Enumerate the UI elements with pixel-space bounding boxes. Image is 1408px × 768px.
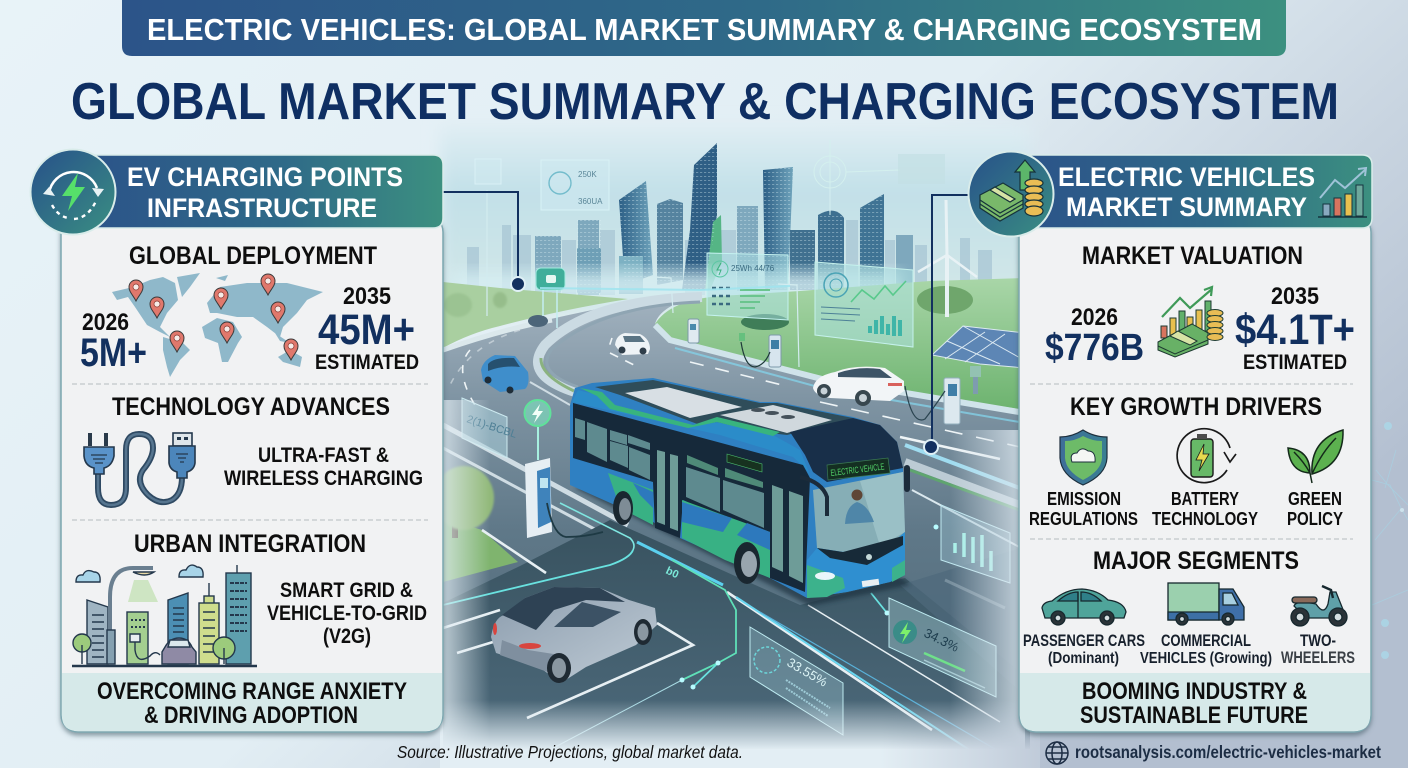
text: green policy	[1287, 488, 1343, 529]
roadside chargers	[688, 319, 981, 424]
central illustration: electric bus in a smart city	[434, 125, 1040, 768]
front cap	[790, 418, 903, 482]
icon: shield emission	[1060, 430, 1107, 485]
top banner	[122, 0, 1286, 56]
parking lines	[443, 530, 1000, 730]
icon: globe	[1046, 742, 1068, 764]
text: battery technology	[1152, 488, 1258, 529]
charging station beside the bus	[524, 400, 603, 538]
stat: 2026 $776B: $776B	[1045, 327, 1144, 369]
source note: Source: Illustrative Projections, global market data.	[397, 742, 743, 762]
text: emission regulations: EMISSION	[1047, 488, 1121, 509]
holo: green sign	[536, 268, 565, 328]
bus body	[570, 378, 905, 598]
holo: bolt circle	[814, 140, 900, 215]
blue roof band	[572, 390, 810, 475]
banner title: ELECTRIC VEHICLES: GLOBAL MARKET SUMMARY & CHARGING ECOSYSTEM	[147, 12, 1262, 47]
road edge stripes lower left	[443, 382, 628, 532]
holo: energy stats	[707, 253, 788, 320]
text: commercial vehicles: VEHICLES (Growing)	[1140, 650, 1272, 667]
text: commercial vehicles: COMMERCIAL	[1161, 632, 1251, 650]
grass and tree lower left	[443, 518, 518, 582]
text: smart grid and V2G: VEHICLE-TO-GRID	[267, 601, 427, 625]
road glyph glow: b0	[664, 565, 680, 581]
stat: 2035 $4.1T+ estimated: 2035	[1271, 283, 1319, 310]
circuit nodes	[680, 524, 938, 690]
wind turbine	[918, 200, 977, 317]
stat: 2026 5M+	[80, 309, 147, 375]
text: battery technology: BATTERY	[1171, 488, 1239, 509]
panel footer text	[1080, 678, 1308, 729]
left hill	[443, 282, 628, 348]
road edge curb	[655, 325, 1025, 413]
destination sign: ELECTRIC VEHICLE	[830, 461, 885, 478]
stat: 2035 45M+ estimated: 45M+	[318, 306, 415, 354]
heading: market valuation: MARKET VALUATION	[1082, 242, 1303, 270]
lower body green swooshes	[608, 473, 653, 525]
white car far	[615, 333, 650, 355]
stat: 2026 5M+: 5M+	[80, 331, 147, 375]
holo: 34.3% panel	[889, 598, 996, 697]
windshield	[813, 472, 905, 552]
text: two-wheelers: WHEELERS	[1281, 649, 1355, 667]
rear wheel	[613, 491, 633, 525]
text: passenger cars	[1023, 632, 1145, 667]
text: green policy: GREEN	[1288, 488, 1342, 509]
icon: plug and USB cable	[84, 433, 195, 505]
bus shadow	[575, 460, 910, 606]
stat: 2035 $4.1T+ estimated: $4.1T+	[1235, 306, 1355, 354]
decorative network right edge	[1372, 422, 1408, 659]
text: smart grid and V2G	[267, 578, 427, 648]
electric bus	[570, 378, 910, 606]
holo: left road panel: 2(1)-BCBL	[465, 413, 518, 441]
panel header: EV CHARGING POINTS	[127, 162, 403, 192]
distant and mid skyline	[467, 143, 992, 297]
connector line left	[440, 192, 525, 291]
blue car	[481, 355, 529, 394]
stat: 2035 45M+ estimated: 2035	[343, 283, 391, 310]
panel footer band	[62, 673, 442, 731]
solar panels	[932, 326, 1025, 368]
front wheel	[734, 542, 760, 584]
holo: top-left panel: 360UA	[578, 197, 603, 206]
bus roof	[595, 380, 853, 435]
text: passenger cars: PASSENGER CARS	[1023, 632, 1145, 650]
heading: global deployment: GLOBAL DEPLOYMENT	[129, 242, 377, 270]
icon: smart city	[72, 565, 257, 666]
edge fades	[440, 400, 490, 768]
lane dashes	[450, 330, 1020, 459]
heading: urban integration: URBAN INTEGRATION	[134, 530, 366, 558]
holo: 34.3% panel: 34.3%	[922, 625, 962, 655]
text: two-wheelers: TWO-	[1300, 632, 1336, 650]
heading: key growth drivers: KEY GROWTH DRIVERS	[1070, 393, 1322, 421]
holo: 33.55% panel: 33.55%	[784, 655, 831, 690]
stat: 2026 $776B: 2026	[1071, 304, 1118, 331]
driver	[845, 490, 874, 524]
destination sign	[827, 458, 890, 480]
mirror	[800, 477, 827, 516]
stat: 2026 5M+: 2026	[82, 309, 129, 336]
text: two-wheelers	[1281, 632, 1355, 667]
dark asphalt foreground	[443, 520, 1030, 768]
white sedan	[813, 367, 904, 406]
text: commercial vehicles	[1140, 632, 1272, 667]
tree on left hill	[444, 292, 507, 317]
panel footer text	[97, 678, 407, 729]
heading: major segments: MAJOR SEGMENTS	[1093, 547, 1299, 575]
panel header: ELECTRIC VEHICLES	[1058, 162, 1315, 192]
holo: 33.55% panel	[750, 627, 843, 735]
panel footer text: OVERCOMING RANGE ANXIETY	[97, 678, 407, 705]
curved median	[538, 297, 702, 402]
holo: left road panel	[462, 398, 518, 458]
panel: EV charging points infrastructure	[30, 150, 443, 732]
panel header: INFRASTRUCTURE	[147, 193, 377, 223]
holo: cloud tile	[475, 159, 501, 184]
text: green policy: POLICY	[1287, 508, 1343, 529]
window band	[573, 403, 810, 592]
horizon glow	[450, 272, 900, 300]
text: passenger cars: (Dominant)	[1048, 650, 1119, 667]
holo: energy stats: 25Wh 44/76	[731, 264, 775, 273]
road surface	[443, 295, 1025, 768]
text: ultra-fast and wireless charging	[224, 443, 423, 490]
silver car foreground	[491, 587, 657, 683]
side destination strip	[727, 454, 762, 472]
panel header	[1030, 155, 1372, 228]
green roof stripe	[580, 388, 780, 436]
text: battery technology: TECHNOLOGY	[1152, 508, 1258, 529]
text: emission regulations: REGULATIONS	[1029, 508, 1138, 529]
icon: passenger car	[1042, 589, 1126, 625]
small distant car	[528, 315, 548, 327]
text: ultra-fast and wireless charging: ULTRA-FAST &	[258, 443, 389, 467]
text: emission regulations	[1029, 488, 1138, 529]
connector line right	[924, 195, 975, 454]
icon: battery technology	[1177, 429, 1236, 483]
icon: money stack and coins	[968, 152, 1054, 236]
panel: electric vehicles market summary	[968, 152, 1372, 732]
roof battery packs	[625, 387, 742, 418]
text: smart grid and V2G: (V2G)	[323, 624, 371, 648]
text: ultra-fast and wireless charging: WIRELESS CHARGING	[224, 466, 423, 490]
icon: green leaves	[1288, 430, 1343, 483]
right mirror	[904, 465, 910, 492]
panel footer text: & DRIVING ADOPTION	[144, 702, 358, 729]
panel footer text: SUSTAINABLE FUTURE	[1080, 702, 1308, 729]
icon: commercial truck	[1168, 583, 1244, 625]
side windows	[575, 418, 803, 583]
stat: 2035 $4.1T+ estimated	[1235, 283, 1355, 374]
hologram panels	[462, 140, 1010, 735]
right lanes near bus	[905, 445, 1025, 608]
stat: 2035 45M+ estimated	[315, 283, 419, 374]
panel body	[1019, 215, 1371, 732]
stat: 2026 $776B	[1045, 304, 1144, 369]
panel header: MARKET SUMMARY	[1066, 192, 1307, 222]
panel footer band	[1020, 673, 1370, 731]
holo: chart	[815, 262, 913, 347]
holo: top-right tile	[898, 154, 945, 184]
bus front bumper	[807, 532, 905, 598]
green field	[655, 278, 1025, 410]
panel body	[61, 215, 443, 732]
panel header	[90, 155, 443, 228]
chart: world map with pins	[112, 273, 323, 377]
holo: road bar chart	[941, 505, 1010, 583]
stat: 2035 45M+ estimated: ESTIMATED	[315, 351, 419, 374]
sky	[440, 125, 1030, 315]
icon: charging cycle	[30, 150, 116, 234]
text: smart grid and V2G: SMART GRID &	[280, 578, 413, 602]
stat: 2035 $4.1T+ estimated: ESTIMATED	[1243, 351, 1347, 374]
icon: scooter	[1291, 586, 1347, 626]
heading: technology advances: TECHNOLOGY ADVANCES	[112, 393, 390, 421]
holo: light poles	[487, 190, 830, 367]
icon: market growth with cash	[1158, 287, 1223, 357]
glowing circuit lines	[443, 503, 1000, 768]
holo: top-left panel: 250K	[578, 170, 597, 179]
icon: header growth chart	[1318, 168, 1367, 217]
holo: top-left panel	[541, 160, 609, 210]
panel footer text: BOOMING INDUSTRY &	[1082, 678, 1307, 705]
hedge	[741, 314, 789, 330]
